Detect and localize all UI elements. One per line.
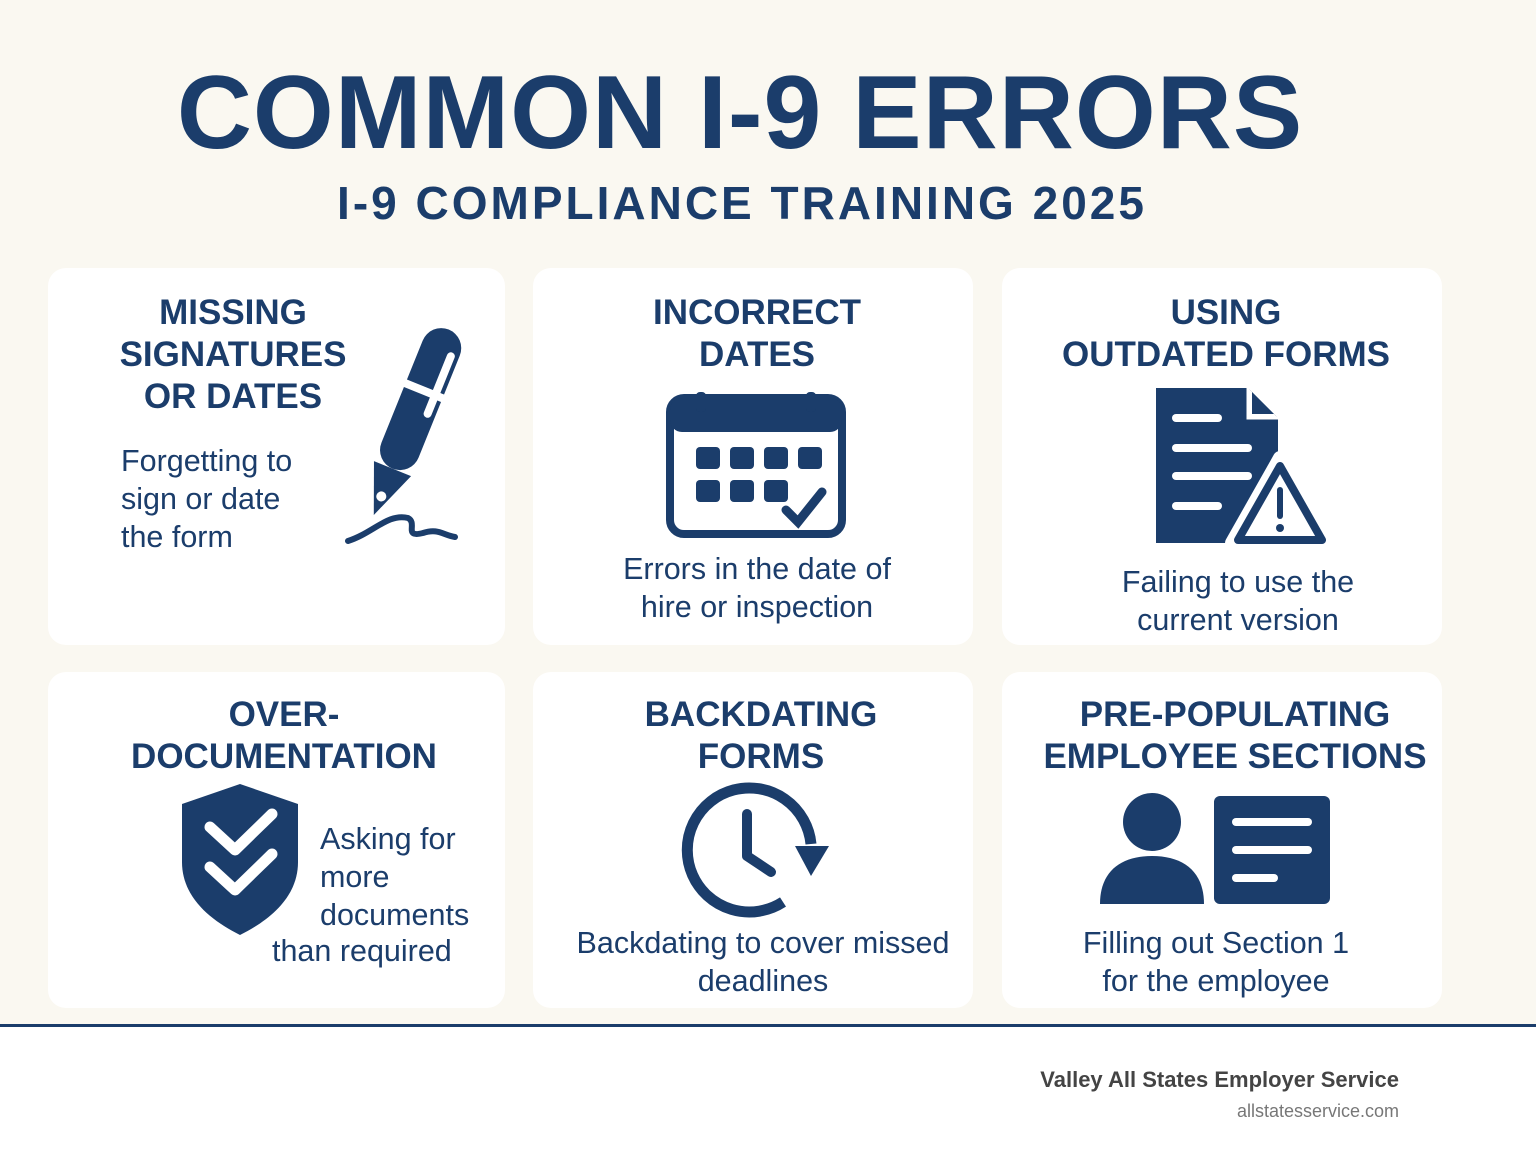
text block: Asking for — [320, 822, 456, 856]
text block: the form — [121, 520, 233, 554]
text block: Failing to use the — [1122, 565, 1354, 599]
heading: SIGNATURES — [120, 335, 346, 374]
panel: outdated forms — [1002, 268, 1442, 645]
footer url: allstatesservice.com — [1237, 1101, 1399, 1121]
text block: hire or inspection — [641, 590, 873, 624]
panel: missing signatures — [48, 268, 505, 645]
heading — [653, 293, 861, 374]
heading: USING — [1171, 293, 1281, 332]
heading — [1043, 695, 1427, 776]
text block — [623, 552, 891, 624]
heading: PRE-POPULATING — [1080, 695, 1390, 734]
icon: shield — [182, 784, 298, 935]
panel: incorrect dates — [533, 268, 973, 645]
text block: more — [320, 860, 390, 894]
title: COMMON I-9 ERRORS — [177, 55, 1303, 171]
subtitle: I-9 COMPLIANCE TRAINING 2025 — [337, 177, 1147, 229]
text block: Backdating to cover missed — [577, 926, 949, 960]
text block: sign or date — [121, 482, 280, 516]
text block: current version — [1137, 603, 1339, 637]
heading: OUTDATED FORMS — [1062, 335, 1390, 374]
icon: calendar — [666, 392, 846, 538]
heading: DOCUMENTATION — [131, 737, 437, 776]
text block: Forgetting to — [121, 444, 292, 478]
text block: Filling out Section 1 — [1083, 926, 1349, 960]
icon: clock — [682, 782, 829, 918]
text block — [1083, 926, 1349, 998]
heading: OR DATES — [144, 377, 322, 416]
icon: document warning — [1156, 388, 1326, 544]
icon: pen — [345, 328, 462, 544]
heading — [1062, 293, 1390, 374]
footer — [0, 1024, 1536, 1154]
text block: documents — [320, 898, 469, 932]
panel: over-documentation — [48, 672, 505, 1008]
heading: EMPLOYEE SECTIONS — [1043, 737, 1427, 776]
text block: Errors in the date of — [623, 552, 891, 586]
text block: for the employee — [1102, 964, 1330, 998]
text block — [1122, 565, 1354, 637]
panel: backdating — [533, 672, 973, 1008]
heading — [131, 695, 437, 776]
footer company name: Valley All States Employer Service — [1040, 1067, 1399, 1092]
heading: INCORRECT — [653, 293, 861, 332]
text block — [577, 926, 949, 998]
heading — [120, 293, 346, 416]
text block — [320, 822, 469, 932]
heading: OVER- — [229, 695, 339, 734]
panel: pre-populating — [1002, 672, 1442, 1008]
heading: FORMS — [698, 737, 824, 776]
text block — [121, 444, 292, 554]
heading: BACKDATING — [645, 695, 877, 734]
heading — [645, 695, 877, 776]
panel: over-documentation: than required — [272, 934, 452, 968]
icon: person and card — [1100, 793, 1330, 904]
heading: DATES — [699, 335, 815, 374]
heading: MISSING — [159, 293, 307, 332]
text block: deadlines — [698, 964, 828, 998]
